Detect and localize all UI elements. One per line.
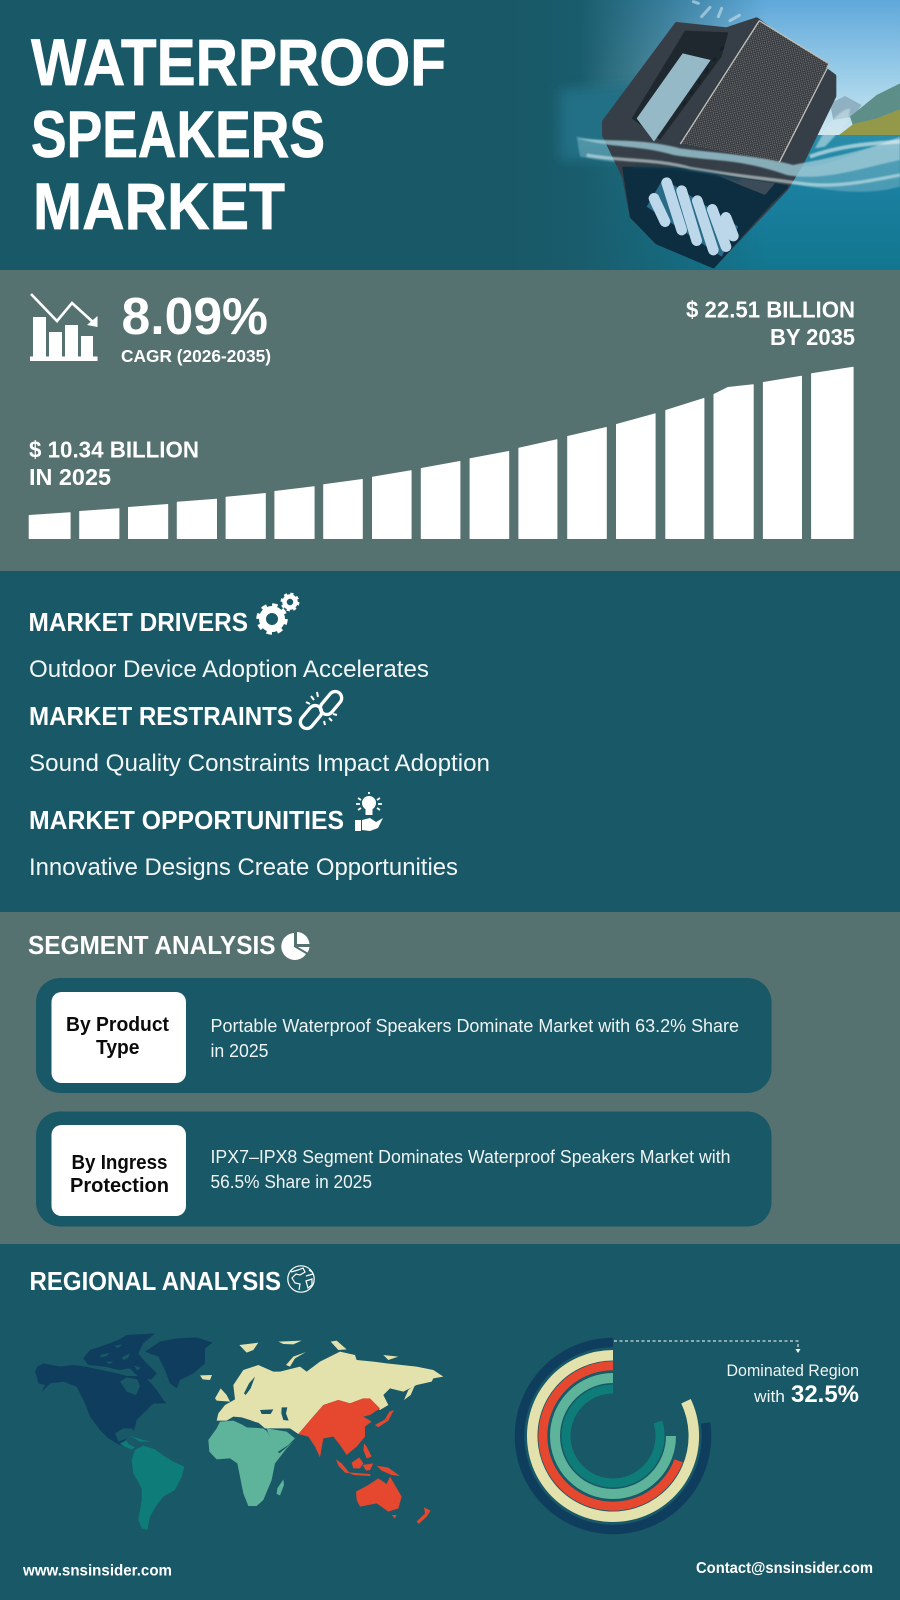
text: product finding: Portable Waterproof Speakers Dominate Market with 63.2% Share (210, 1015, 739, 1036)
icon: light bulb in hand (355, 792, 383, 831)
region: africa and middle east (208, 1421, 295, 1506)
icon: broken chain link (298, 689, 344, 731)
icon: chart with trend arrow (30, 294, 98, 361)
card: by ingress protection (36, 1112, 772, 1226)
icon: gears (258, 594, 298, 633)
2025 market value (29, 436, 199, 490)
2025 market value: $ 10.34 BILLION (29, 436, 199, 462)
label box: by ingress protection: By Ingress (72, 1152, 168, 1174)
label box: by product type (52, 992, 186, 1083)
region: north america (35, 1333, 213, 1445)
inland seas (233, 1377, 289, 1428)
heading: market drivers: MARKET DRIVERS (28, 607, 248, 637)
callout: dominated region arrow (614, 1341, 800, 1353)
icon: pie chart (281, 932, 310, 960)
2035 market value: $ 22.51 BILLION (686, 296, 855, 322)
label box: by product type: Type (96, 1037, 140, 1059)
region: south america (120, 1436, 184, 1530)
label box: by product type: By Product (66, 1014, 169, 1036)
text: ingress finding: IPX7–IPX8 Segment Dominates Waterproof Speakers Market with (210, 1146, 730, 1167)
footer: website: www.snsinsider.com (22, 1562, 172, 1580)
donut chart: regional share (520, 1342, 707, 1530)
2035 market value (686, 296, 855, 350)
callout: dominated region text: with (753, 1388, 785, 1406)
heading: regional analysis: REGIONAL ANALYSIS (30, 1266, 281, 1296)
world map (35, 1333, 443, 1530)
panel: segment analysis (0, 912, 900, 1244)
bar chart: market growth (29, 367, 853, 538)
text: restraint: Sound Quality Constraints Impact Adoption (29, 750, 490, 777)
card: by product type (36, 978, 772, 1093)
panel: hero header (0, 0, 900, 270)
heading: segment analysis: SEGMENT ANALYSIS (28, 930, 276, 960)
2035 market value: BY 2035 (770, 324, 855, 350)
region: asia pacific (298, 1398, 431, 1524)
heading: market restraints: MARKET RESTRAINTS (29, 701, 293, 731)
panel: market dynamics (0, 571, 900, 912)
title: MARKET (33, 169, 285, 243)
CAGR label: CAGR (2026-2035) (121, 346, 271, 366)
panel: market size (0, 270, 900, 571)
footer: contact email: Contact@snsinsider.com (696, 1560, 873, 1577)
title: SPEAKERS (31, 97, 325, 171)
heading: market opportunities: MARKET OPPORTUNITIES (29, 805, 344, 835)
image: waterproof speaker splashing in water (554, 0, 900, 270)
panel: regional analysis (0, 1244, 900, 1600)
2025 market value: IN 2025 (29, 464, 111, 490)
text: ingress finding: 56.5% Share in 2025 (210, 1171, 372, 1192)
callout: dominated region text (726, 1362, 859, 1408)
lakes and straits: canada (100, 1344, 141, 1395)
callout: dominated region text: Dominated Region (726, 1362, 859, 1380)
callout: dominated region text: 32.5% (791, 1381, 859, 1408)
text: product finding (210, 1015, 739, 1061)
label box: by ingress protection: Protection (70, 1175, 169, 1197)
CAGR value: 8.09% (122, 288, 268, 346)
text: opportunity: Innovative Designs Create Opportunities (29, 854, 458, 881)
icon: globe (288, 1266, 314, 1292)
text: driver: Outdoor Device Adoption Accelerates (29, 656, 429, 683)
region: europe and north asia (200, 1341, 443, 1434)
title: WATERPROOF (31, 25, 446, 99)
title (31, 25, 446, 243)
text: product finding: in 2025 (210, 1040, 268, 1061)
text: ingress finding (210, 1146, 730, 1192)
label box: by ingress protection (52, 1125, 186, 1216)
